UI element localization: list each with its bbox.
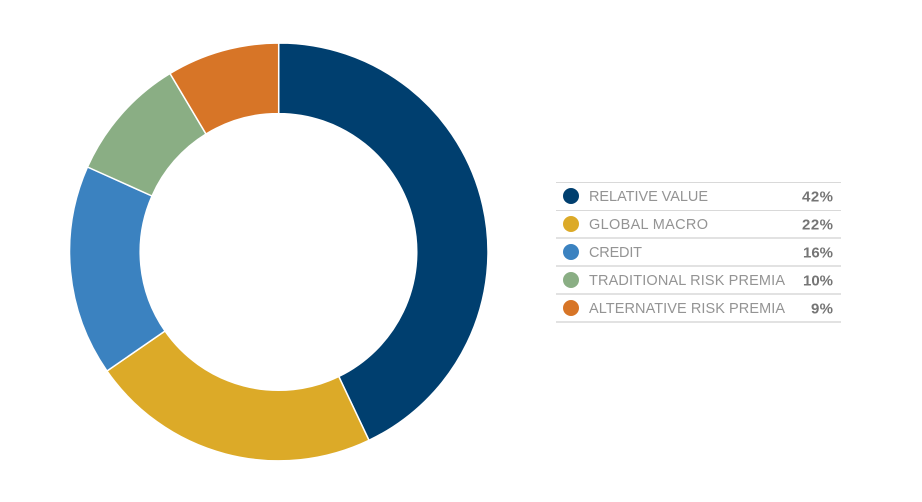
segment: relative value 42% xyxy=(279,43,488,440)
legend xyxy=(563,188,833,318)
legend row: traditional risk premia: TRADITIONAL RISK PREMIA xyxy=(589,273,785,289)
legend row: global macro xyxy=(563,216,833,234)
legend row: global macro: GLOBAL MACRO xyxy=(589,217,708,233)
legend row: credit: CREDIT xyxy=(589,245,642,261)
legend row: relative value xyxy=(563,188,833,206)
legend row: traditional risk premia xyxy=(563,272,833,290)
legend row: credit xyxy=(563,244,833,262)
legend row: credit: 16% xyxy=(803,244,833,262)
legend row: alternative risk premia: ALTERNATIVE RISK PREMIA xyxy=(589,301,785,317)
legend row: alternative risk premia xyxy=(563,300,833,318)
segment: alternative risk premia 9% xyxy=(170,43,279,134)
legend row: relative value: RELATIVE VALUE xyxy=(589,189,708,205)
donut chart xyxy=(70,43,488,461)
segment: traditional risk premia 10% xyxy=(88,74,206,196)
legend row: relative value: 42% xyxy=(802,188,833,206)
legend row: global macro: 22% xyxy=(802,216,833,234)
segment: global macro 22% xyxy=(107,331,369,461)
legend row: alternative risk premia: 9% xyxy=(811,300,833,318)
segment: credit 16% xyxy=(70,167,165,371)
legend row: traditional risk premia: 10% xyxy=(803,272,833,290)
